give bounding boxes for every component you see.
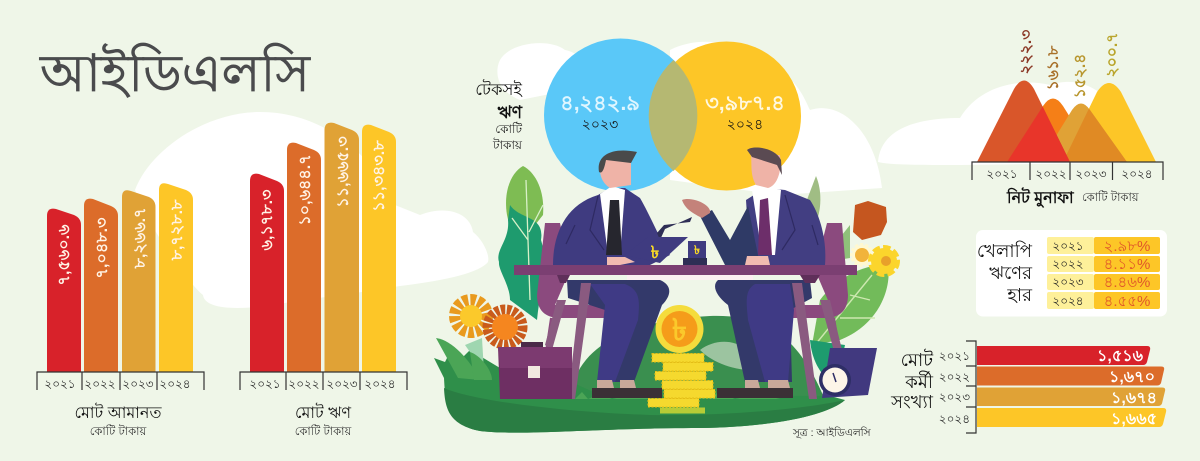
axis and years: loans: ২০২৩	[326, 377, 358, 391]
label: sustainable loans: টেকসই	[475, 79, 523, 99]
label: default loan rate: হার	[1006, 285, 1033, 305]
bar 2023: deposits	[122, 190, 156, 372]
axis and years: staff: ২০২১	[939, 349, 970, 363]
peak 2022	[1007, 98, 1098, 162]
plants behind: right leaves	[805, 176, 889, 385]
title: আইডিএলসি	[39, 43, 312, 103]
left man: legs	[567, 280, 669, 382]
bar 2023: staff: ১,৬৭৪	[1111, 390, 1157, 407]
value 2023	[560, 92, 640, 132]
label: sustainable loans: টাকায়	[492, 138, 523, 152]
chairs	[537, 223, 848, 372]
left man: head	[600, 152, 637, 188]
small book stack	[683, 241, 707, 265]
right man	[682, 147, 825, 398]
bar 2021: loans: ৬,১৭৮.৩	[259, 189, 276, 250]
label: total staff: মোট	[901, 349, 934, 370]
label: net profit: কোটি টাকায়	[1082, 190, 1140, 204]
rate table: ২০২৩	[1052, 275, 1084, 289]
flowers right	[852, 201, 897, 274]
label: net profit	[1006, 187, 1140, 208]
folder with taka symbol: ৳	[651, 243, 659, 262]
label: total loans	[295, 403, 352, 438]
bar 2024: deposits: ৮,৭২৮.৮	[169, 199, 186, 261]
axis and years: loans: ২০২৪	[364, 377, 396, 391]
bar 2022: staff	[977, 366, 1164, 386]
taka coin	[656, 305, 704, 353]
label: total loans: মোট ঋণ	[295, 403, 351, 422]
peak 2021	[977, 80, 1070, 162]
axis and years: deposits: ২০২২	[84, 377, 116, 391]
value 2023: ২০২৩	[582, 116, 618, 132]
plants behind: left leaf	[498, 166, 544, 320]
axis and years: profit: ২০২৩	[1075, 167, 1107, 181]
bar 2024: deposits	[159, 183, 193, 372]
right man: legs	[715, 280, 812, 382]
rate table	[1047, 237, 1160, 310]
axis and years: profit: ২০২২	[1035, 167, 1067, 181]
bar 2021: deposits	[47, 209, 81, 372]
table	[514, 265, 857, 399]
bar 2021: deposits: ৭,৫৬০.৬	[56, 224, 73, 285]
flower: sunflower	[456, 301, 486, 331]
folder with taka symbol	[625, 237, 688, 263]
alarm clock and bag	[819, 348, 877, 398]
bar 2024: staff: ১,৬৬৫	[1111, 411, 1157, 428]
right man: torso	[746, 188, 825, 265]
axis and years: loans: ২০২১	[249, 377, 281, 391]
bar 2023: loans: ১১,৬৬৫.৩	[335, 136, 352, 208]
bar chart: total deposits	[37, 183, 204, 438]
rate table: ২.৯৮%	[1104, 238, 1150, 255]
label: total deposits: কোটি টাকায়	[90, 424, 147, 438]
label: default loan rate: খেলাপি	[977, 241, 1033, 261]
label: total staff	[890, 349, 934, 412]
source note: সূত্র : আইডিএলসি	[792, 426, 872, 439]
venn diagram: sustainable loans	[544, 38, 801, 192]
coin stack	[648, 354, 715, 414]
rate table: ২০২২	[1052, 257, 1084, 271]
axis and years: profit: ২০২৪	[1121, 167, 1153, 181]
axis and years: profit: ২০২১	[986, 167, 1018, 181]
value 2024: ৩,৯৮৭.৪	[705, 92, 785, 115]
peak 2023	[1056, 104, 1126, 162]
label: total staff: কর্মী	[904, 371, 934, 392]
rate table: ২০২৪	[1052, 294, 1084, 308]
bar 2024: loans: ১১,৩৪৩.৮	[371, 140, 388, 212]
value 2024	[705, 92, 785, 132]
label: default loan rate	[977, 241, 1033, 305]
bar 2021: staff	[977, 346, 1150, 365]
rate table: ২০২১	[1052, 239, 1084, 253]
axis and years: staff: ২০২২	[939, 370, 970, 384]
bar 2023: deposits: ৮,২৬৬.৭	[132, 208, 149, 269]
bar 2021: staff: ১,৫১৬	[1097, 348, 1144, 365]
profit values: ১৫২.৪	[1072, 54, 1089, 98]
bar 2024: staff	[977, 408, 1166, 428]
axis and years: profit	[972, 162, 1163, 181]
bar 2022: deposits	[84, 199, 118, 372]
axis and years: loans: ২০২২	[288, 377, 320, 391]
bar 2023: loans	[324, 123, 359, 372]
label: total deposits	[75, 403, 162, 438]
axis and years: deposits: ২০২১	[44, 377, 76, 391]
right man: arm	[700, 206, 760, 265]
axis and years: staff: ২০২৪	[939, 412, 970, 426]
axis and years: staff	[939, 341, 976, 433]
label: sustainable loans: কোটি	[495, 122, 522, 136]
bar 2022: deposits: ৭,০৪৮.৩	[94, 217, 111, 278]
peak 2024	[1063, 83, 1156, 162]
background clouds	[135, 42, 1120, 308]
label: default loan rate: ঋণের	[989, 263, 1033, 283]
axis and years: deposits: ২০২৪	[159, 377, 191, 391]
rate table: ৪.১১%	[1104, 256, 1150, 273]
left man: hand and pen	[657, 217, 692, 240]
bar 2022: loans	[287, 143, 321, 372]
bar 2024: loans	[362, 125, 396, 372]
bar 2022: staff: ১,৬৭০	[1109, 369, 1155, 386]
bar chart: total loans	[240, 123, 407, 438]
low plants left	[436, 338, 492, 380]
profit values: ২২২.৩	[1018, 29, 1035, 74]
label: total deposits: মোট আমানত	[75, 403, 162, 422]
value 2023: ৪,২৪২.৯	[560, 92, 640, 115]
label: net profit: নিট মুনাফা	[1006, 187, 1075, 208]
profit values	[1018, 29, 1121, 98]
profit values: ২০০.৭	[1104, 33, 1121, 77]
mountain chart: net profit	[972, 29, 1163, 208]
axis and years: deposits	[37, 372, 204, 391]
bar 2021: loans	[250, 174, 284, 372]
illustration: two businessmen at a table	[434, 147, 897, 433]
left man: torso	[553, 188, 670, 265]
axis and years: staff: ২০২৩	[939, 390, 970, 404]
briefcase	[498, 342, 572, 399]
bar chart: total staff	[890, 341, 1166, 433]
left man	[553, 151, 692, 398]
ground	[434, 316, 845, 433]
label: total loans: কোটি টাকায়	[295, 424, 352, 438]
taka coin: ৳	[672, 314, 687, 347]
rate table: ৪.৫৫%	[1104, 293, 1150, 310]
bar 2022: loans: ১০,৬৪৪.৭	[297, 154, 314, 226]
panel: default loan rate	[976, 230, 1167, 316]
small book stack: ৳	[694, 243, 700, 257]
axis and years: deposits: ২০২৩	[122, 377, 154, 391]
label: sustainable loans	[475, 79, 523, 152]
axis and years: loans	[240, 372, 407, 391]
right man: head	[751, 155, 780, 188]
profit values: ১৬১.৮	[1045, 45, 1062, 90]
flower: orange	[489, 311, 521, 343]
value 2024: ২০২৪	[727, 116, 763, 132]
label: total staff: সংখ্যা	[890, 392, 934, 412]
rate table: ৪.৪৬%	[1104, 274, 1150, 291]
bar 2023: staff	[977, 388, 1165, 407]
label: sustainable loans: ঋণ	[497, 103, 523, 122]
